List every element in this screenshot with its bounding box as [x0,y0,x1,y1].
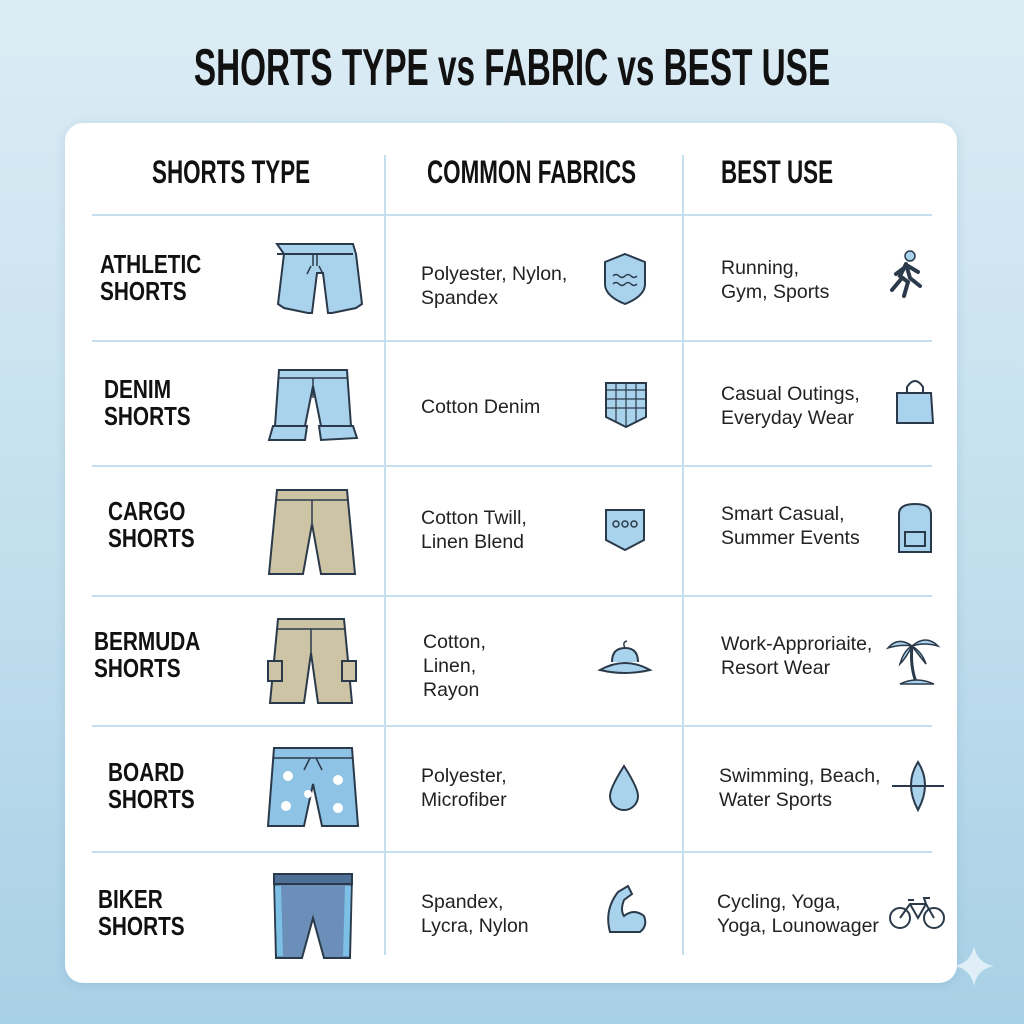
text: cargo fabrics: Linen Blend [421,531,524,553]
icon: surfboard [892,760,944,812]
row 3 label [108,496,195,553]
icon: runner [890,250,922,298]
text: denim use: Casual Outings, [721,383,860,405]
text: athletic use [721,257,829,303]
title: SHORTS TYPE vs FABRIC vs BEST USE [194,39,830,97]
text: denim fabrics: Cotton Denim [421,396,540,418]
text: biker use [717,891,879,937]
heading: common fabrics: COMMON FABRICS [427,154,636,190]
icon: bicycle [889,897,945,929]
row 6 label [98,884,185,941]
text: board use: Water Sports [719,789,832,811]
text: bermuda fabrics: Linen, [423,655,476,677]
text: bermuda use: Resort Wear [721,657,830,679]
text: cargo use [721,503,860,549]
panel: table card [65,123,957,983]
text: biker fabrics [421,891,529,937]
text: denim use: Everyday Wear [721,407,854,429]
icon: board shorts [266,747,360,827]
icon: palm tree [886,639,940,685]
text: board use: Swimming, Beach, [719,765,880,787]
heading: shorts type: SHORTS TYPE [152,154,310,190]
row 2 label: DENIM [104,374,171,404]
text: athletic fabrics [421,263,567,309]
row 5 label: BOARD [108,757,184,787]
text: athletic use: Running, [721,257,799,279]
row 1 label: ATHLETIC [100,249,201,279]
row 1 label [100,249,201,306]
text: bermuda fabrics: Cotton, [423,631,486,653]
text: biker fabrics: Lycra, Nylon [421,915,529,937]
row 1 label: SHORTS [100,276,187,306]
icon: water drop [609,764,639,811]
text: board fabrics: Polyester, [421,765,507,787]
row 2 label: SHORTS [104,401,191,431]
row 4 label [94,626,200,683]
text: athletic use: Gym, Sports [721,281,829,303]
text: cargo use: Summer Events [721,527,860,549]
text: bermuda use: Work-Approriaite, [721,633,872,655]
row 5 label: SHORTS [108,784,195,814]
icon: bermuda shorts [267,618,357,704]
icon: denim shorts [268,369,358,441]
row 4 label: SHORTS [94,653,181,683]
icon: shield [604,252,646,306]
text: board fabrics: Microfiber [421,789,507,811]
row 5 label [108,757,195,814]
icon: cargo shorts [268,489,356,575]
row 2 label [104,374,191,431]
row 3 label: CARGO [108,496,185,526]
icon: shopping bag [896,380,934,424]
text: athletic fabrics: Spandex [421,287,498,309]
text: biker fabrics: Spandex, [421,891,503,913]
text: board fabrics [421,765,507,811]
icon: athletic shorts [275,243,364,314]
icon: flexed arm [607,884,646,933]
text: board use [719,765,880,811]
row 6 label: SHORTS [98,911,185,941]
text: bermuda fabrics: Rayon [423,679,479,701]
text: athletic fabrics: Polyester, Nylon, [421,263,567,285]
icon: sparkle [955,946,994,986]
icon: pocket [605,509,645,552]
text: bermuda fabrics [423,631,486,701]
text: biker use: Yoga, Lounowager [717,915,879,937]
icon: biker shorts [272,873,353,959]
text: bermuda use [721,633,872,679]
icon: hat [597,640,653,674]
row 6 label: BIKER [98,884,163,914]
text: cargo fabrics: Cotton Twill, [421,507,527,529]
text: denim use [721,383,860,429]
heading: best use: BEST USE [721,154,833,190]
icon: checked fabric [605,382,647,428]
text: cargo use: Smart Casual, [721,503,845,525]
text: cargo fabrics [421,507,527,553]
row 4 label: BERMUDA [94,626,200,656]
row 3 label: SHORTS [108,523,195,553]
text: biker use: Cycling, Yoga, [717,891,841,913]
icon: backpack [898,503,932,553]
